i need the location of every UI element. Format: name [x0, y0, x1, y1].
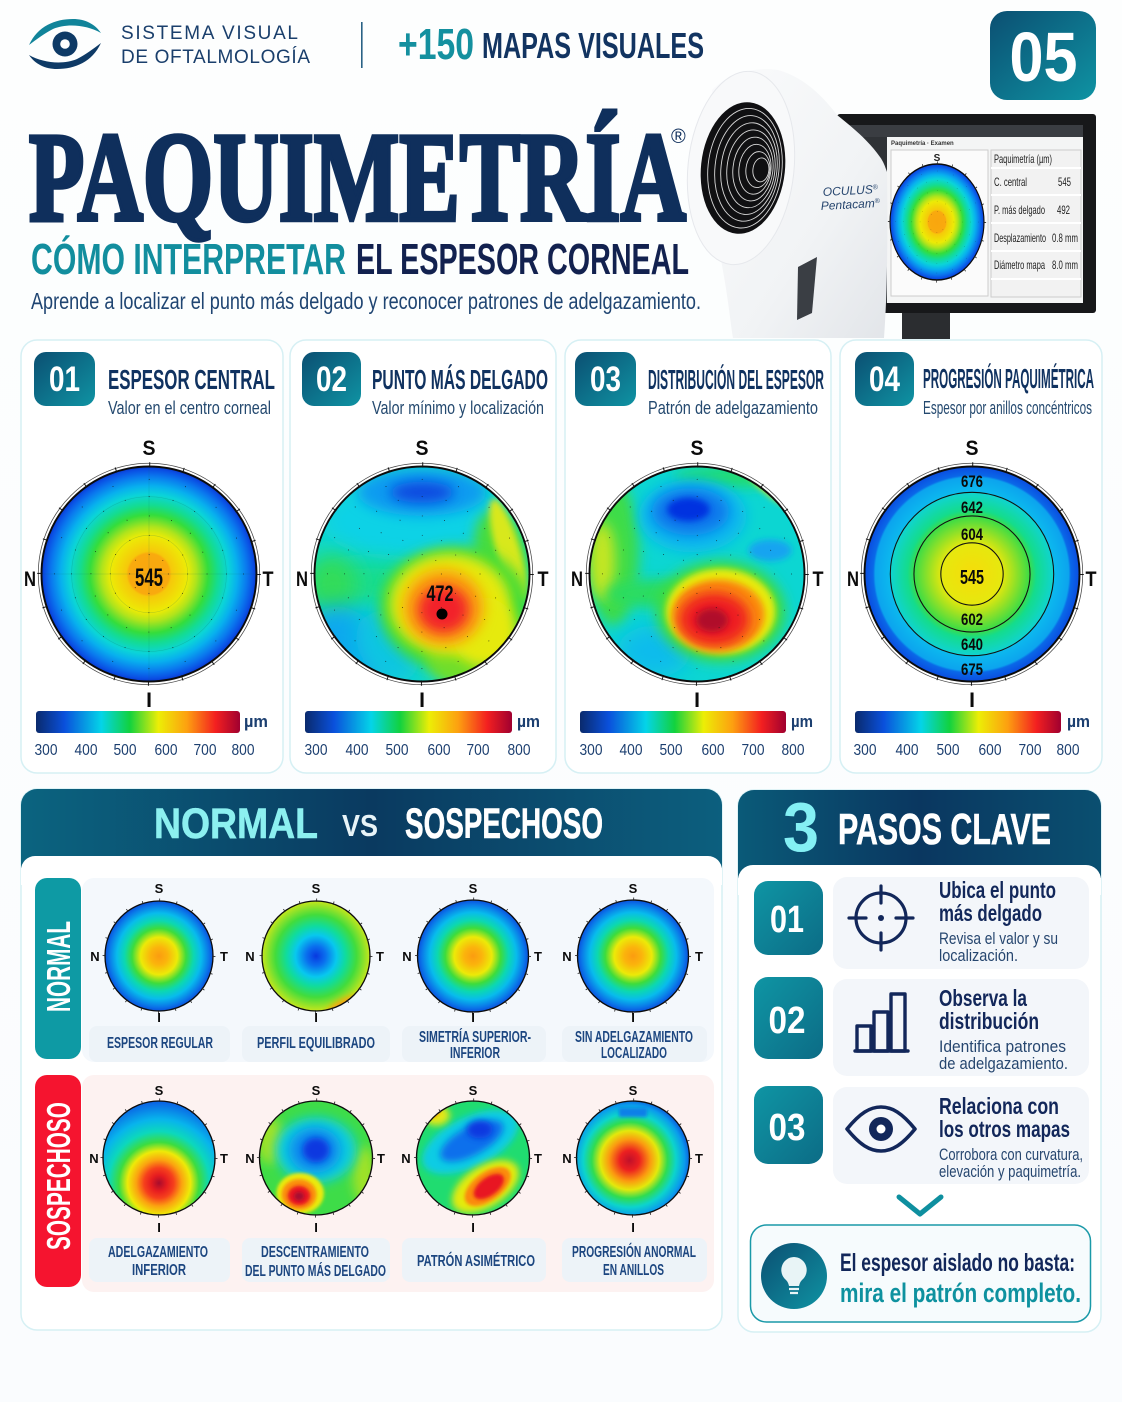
device: Pentacam: ® — [872, 183, 879, 191]
colour scale: 800 — [782, 742, 805, 759]
map: patron asimetrico: I — [471, 1220, 475, 1235]
colour scale: 500 — [386, 742, 409, 759]
map: espesor regular: S — [155, 881, 164, 896]
colour scale: 800 — [508, 742, 531, 759]
captions: PERFIL EQUILIBRADO — [257, 1035, 375, 1052]
map: adelgazamiento inferior: N — [89, 1151, 99, 1166]
screen table: C. central — [994, 175, 1027, 189]
heading — [108, 364, 275, 418]
map: sin adelgazamiento: S — [629, 881, 638, 896]
captions: PATRÓN ASIMÉTRICO — [417, 1252, 535, 1270]
step 01: Ubica el punto — [939, 877, 1056, 903]
map: progresion anormal — [562, 1083, 703, 1235]
colour scale — [854, 711, 1090, 759]
heading: SOSPECHOSO — [405, 800, 603, 848]
panel: card 03 distribucion del espesor — [565, 340, 831, 773]
map: concentric rings: 642 — [961, 498, 983, 517]
map: simetria: S — [469, 881, 478, 896]
screen table: Desplazamiento — [994, 231, 1046, 245]
map: central thickness: I — [146, 689, 152, 712]
colour scale: 700 — [1018, 742, 1042, 759]
map: thinnest point: S — [416, 437, 428, 460]
map: adelgazamiento inferior: T — [220, 1151, 228, 1166]
title: PAQUIMETRÍA — [29, 108, 686, 248]
monitor with pachymetry screen — [837, 114, 1096, 339]
map: simetria: I — [471, 1010, 475, 1025]
badge 01 — [34, 352, 95, 406]
map: concentric rings: 640 — [961, 635, 983, 654]
map: descentramiento: T — [377, 1151, 385, 1166]
map: espesor regular — [90, 881, 228, 1025]
map: perfil equilibrado: S — [312, 881, 321, 896]
colour scale — [34, 711, 268, 759]
map: concentric rings: I — [969, 689, 975, 712]
map: descentramiento: N — [245, 1151, 255, 1166]
row: suspicious maps — [35, 1075, 714, 1292]
step 01: Revisa el valor y su — [939, 929, 1058, 948]
step 03: 03 — [768, 1107, 806, 1149]
brand name: SISTEMA VISUAL — [121, 23, 298, 44]
colour scale: 500 — [660, 742, 683, 759]
map: sin adelgazamiento: T — [695, 949, 703, 964]
colour scale: 400 — [620, 742, 643, 759]
icon: bars — [855, 994, 908, 1051]
brand name: DE OFTALMOLOGÍA — [121, 47, 310, 68]
map: distribution: I — [694, 689, 700, 712]
colour scale: 700 — [466, 742, 490, 759]
screen table: Diámetro mapa — [994, 258, 1045, 272]
captions: DEL PUNTO MÁS DELGADO — [245, 1263, 386, 1280]
heading — [783, 788, 1051, 866]
monitor with pachymetry screen: S — [934, 153, 941, 164]
heading — [154, 800, 603, 848]
screen table: 8.0 mm — [1052, 258, 1078, 272]
colour scale: µm — [791, 712, 813, 731]
colour scale: 700 — [194, 742, 217, 759]
screen table: Paquimetría (µm) — [994, 152, 1052, 166]
intro text: Aprende a localizar el punto más delgado y reconocer patrones de adelgazamiento. — [31, 288, 701, 314]
map: simetria: T — [534, 949, 542, 964]
map: central thickness: T — [262, 568, 274, 591]
text: DISTRIBUCIÓN DEL ESPESOR — [648, 364, 824, 395]
step 02 — [754, 977, 1089, 1076]
step 02: distribución — [939, 1008, 1039, 1034]
map: thinnest point: T — [538, 568, 549, 591]
device: Pentacam: Pentacam — [820, 196, 875, 213]
icon: light bulb — [761, 1243, 827, 1309]
map: thinnest point: N — [296, 568, 308, 591]
screen table — [991, 150, 1081, 297]
map: patron asimetrico — [401, 1083, 542, 1235]
panel: card 02 punto mas delgado — [286, 340, 556, 773]
captions: SIMETRÍA SUPERIOR- — [419, 1029, 531, 1046]
map: sin adelgazamiento — [562, 881, 703, 1025]
step 02: Observa la — [939, 985, 1027, 1011]
colour scale: 400 — [74, 742, 98, 759]
colour scale: 400 — [346, 742, 369, 759]
colour scale: µm — [244, 712, 268, 731]
captions: INFERIOR — [132, 1262, 186, 1279]
step 02: 02 — [768, 1000, 806, 1042]
arrow: chevron — [899, 1197, 941, 1214]
map: simetria: N — [402, 949, 412, 964]
colour scale: 700 — [742, 742, 765, 759]
captions: SIN ADELGAZAMIENTO — [575, 1029, 693, 1046]
map: concentric rings: T — [1086, 568, 1097, 591]
map: perfil equilibrado: I — [314, 1010, 318, 1025]
step 01 — [754, 877, 1089, 969]
step 03: Relaciona con — [939, 1093, 1059, 1119]
captions — [89, 1026, 707, 1062]
colour scale: 400 — [896, 742, 919, 759]
subtitle: EL ESPESOR CORNEAL — [356, 235, 689, 284]
map: espesor regular: T — [220, 949, 228, 964]
heading: 3 — [783, 788, 819, 866]
captions: ADELGAZAMIENTO — [108, 1244, 208, 1261]
screen table: 545 — [1058, 175, 1071, 189]
heading — [648, 364, 824, 418]
heading: VS — [342, 808, 378, 843]
colour scale: 300 — [854, 742, 877, 759]
maps count: MAPAS VISUALES — [482, 25, 704, 66]
map: perfil equilibrado — [245, 881, 384, 1025]
step 03 — [754, 1086, 1089, 1184]
map: sin adelgazamiento: I — [631, 1010, 635, 1025]
device: Pentacam: ® — [874, 197, 881, 205]
colour scale: 500 — [114, 742, 137, 759]
heading: Valor mínimo y localización — [372, 398, 544, 418]
subtitle — [31, 234, 689, 284]
map: central thickness: 545 — [135, 564, 163, 592]
captions: ESPESOR REGULAR — [107, 1035, 213, 1052]
device: Pentacam: OCULUS — [822, 182, 873, 199]
thinnest point marker — [426, 581, 454, 620]
step 03: los otros mapas — [939, 1116, 1070, 1142]
badge 01: 01 — [49, 360, 80, 399]
map: concentric rings: 604 — [961, 525, 983, 544]
colour scale: 800 — [232, 742, 255, 759]
thinnest point marker: 472 — [426, 581, 454, 606]
heading: Patrón de adelgazamiento — [648, 398, 818, 418]
panel: card 04 progresion paquimetrica — [840, 340, 1102, 773]
map: concentric rings: N — [847, 568, 859, 591]
map: adelgazamiento inferior: I — [157, 1220, 161, 1235]
panel: 3 pasos clave — [738, 788, 1101, 1332]
badge 03 — [575, 352, 636, 406]
captions: LOCALIZADO — [601, 1045, 667, 1062]
map: thinnest point: I — [419, 689, 425, 712]
map: concentric rings: 545 — [960, 567, 984, 589]
colour scale: 800 — [1056, 742, 1080, 759]
map: concentric rings: 676 — [961, 472, 983, 491]
colour scale: µm — [517, 712, 540, 731]
map: adelgazamiento inferior: S — [155, 1083, 164, 1098]
brand name — [121, 23, 310, 68]
map: distribution — [571, 437, 824, 712]
icon: target — [849, 886, 913, 950]
map: simetria — [402, 881, 542, 1025]
title: ® — [671, 126, 686, 148]
issue number badge: 05 — [1010, 18, 1078, 96]
map: espesor regular: N — [90, 949, 100, 964]
badge 03: 03 — [590, 360, 621, 399]
row: suspicious maps: SOSPECHOSO — [40, 1102, 77, 1250]
captions — [89, 1238, 707, 1282]
colour scale: 600 — [428, 742, 451, 759]
map: distribution: T — [812, 568, 824, 591]
map: espesor regular: I — [157, 1010, 161, 1025]
panel: normal vs sospechoso — [21, 789, 722, 1330]
screen table: 492 — [1057, 203, 1070, 217]
captions: INFERIOR — [450, 1045, 500, 1062]
badge 04: 04 — [869, 360, 900, 399]
map: thinnest point — [286, 437, 549, 712]
colour scale: 600 — [978, 742, 1002, 759]
map: distribution: N — [571, 568, 583, 591]
map: progresion anormal: N — [562, 1151, 572, 1166]
subtitle: CÓMO INTERPRETAR — [31, 234, 346, 284]
colour scale: 600 — [154, 742, 178, 759]
map: concentric rings: 675 — [961, 660, 983, 679]
step 01: localización. — [939, 946, 1018, 965]
map: descentramiento: S — [312, 1083, 321, 1098]
colour scale: 300 — [304, 742, 328, 759]
maps count — [398, 20, 704, 69]
colour scale — [580, 711, 813, 759]
map: sin adelgazamiento: N — [562, 949, 572, 964]
screen table: P. más delgado — [994, 203, 1045, 217]
row: normal maps: NORMAL — [40, 921, 77, 1012]
badge 04 — [855, 352, 914, 406]
maps count: +150 — [398, 20, 474, 69]
step 01: más delgado — [939, 900, 1042, 926]
map: distribution: S — [690, 437, 704, 460]
map: central thickness: S — [142, 437, 156, 460]
heading: PUNTO MÁS DELGADO — [372, 364, 548, 395]
heading: Valor en el centro corneal — [108, 398, 271, 418]
map: progresion anormal: I — [631, 1220, 635, 1235]
logo: eye icon — [29, 19, 101, 69]
heading — [372, 364, 548, 418]
map: central thickness — [24, 437, 274, 712]
map: adelgazamiento inferior — [89, 1083, 228, 1235]
heading: ESPESOR CENTRAL — [108, 364, 275, 395]
colour scale: 300 — [34, 742, 58, 759]
colour scale: 300 — [580, 742, 603, 759]
panel: card 01 espesor central — [21, 340, 283, 773]
callout — [750, 1225, 1090, 1322]
step 02: Identifica patrones — [939, 1037, 1066, 1056]
map: patron asimetrico: T — [534, 1151, 542, 1166]
monitor with pachymetry screen: Paquimetría · Examen — [891, 141, 954, 147]
row: normal maps — [35, 878, 714, 1062]
heading: NORMAL — [154, 800, 318, 848]
map: perfil equilibrado: N — [245, 949, 255, 964]
issue number badge — [990, 11, 1096, 100]
badge 02 — [302, 352, 361, 406]
colour scale: µm — [1067, 712, 1090, 731]
map: perfil equilibrado: T — [376, 949, 384, 964]
map: descentramiento: I — [314, 1220, 318, 1235]
colour scale: 500 — [936, 742, 960, 759]
map: progresion anormal: S — [629, 1083, 638, 1098]
captions: EN ANILLOS — [603, 1262, 664, 1279]
step 01: 01 — [770, 899, 804, 941]
map: descentramiento — [245, 1083, 385, 1235]
map: progresion anormal: T — [695, 1151, 703, 1166]
step 02: de adelgazamiento. — [939, 1054, 1068, 1073]
device: Pentacam — [678, 66, 887, 338]
heading — [923, 363, 1094, 418]
map: central thickness: N — [24, 568, 36, 591]
map: concentric rings — [847, 437, 1097, 712]
map: concentric rings: S — [966, 437, 978, 460]
map: patron asimetrico: N — [401, 1151, 411, 1166]
colour scale: 600 — [702, 742, 725, 759]
step 03: elevación y paquimetría. — [939, 1162, 1081, 1181]
map: concentric rings: 602 — [961, 610, 983, 629]
map: patron asimetrico: S — [469, 1083, 478, 1098]
captions: DESCENTRAMIENTO — [261, 1244, 369, 1261]
captions: PROGRESIÓN ANORMAL — [572, 1243, 696, 1261]
icon: eye — [847, 1107, 915, 1151]
screen table: 0.8 mm — [1052, 231, 1078, 245]
colour scale — [304, 711, 540, 759]
badge 02: 02 — [316, 360, 347, 399]
